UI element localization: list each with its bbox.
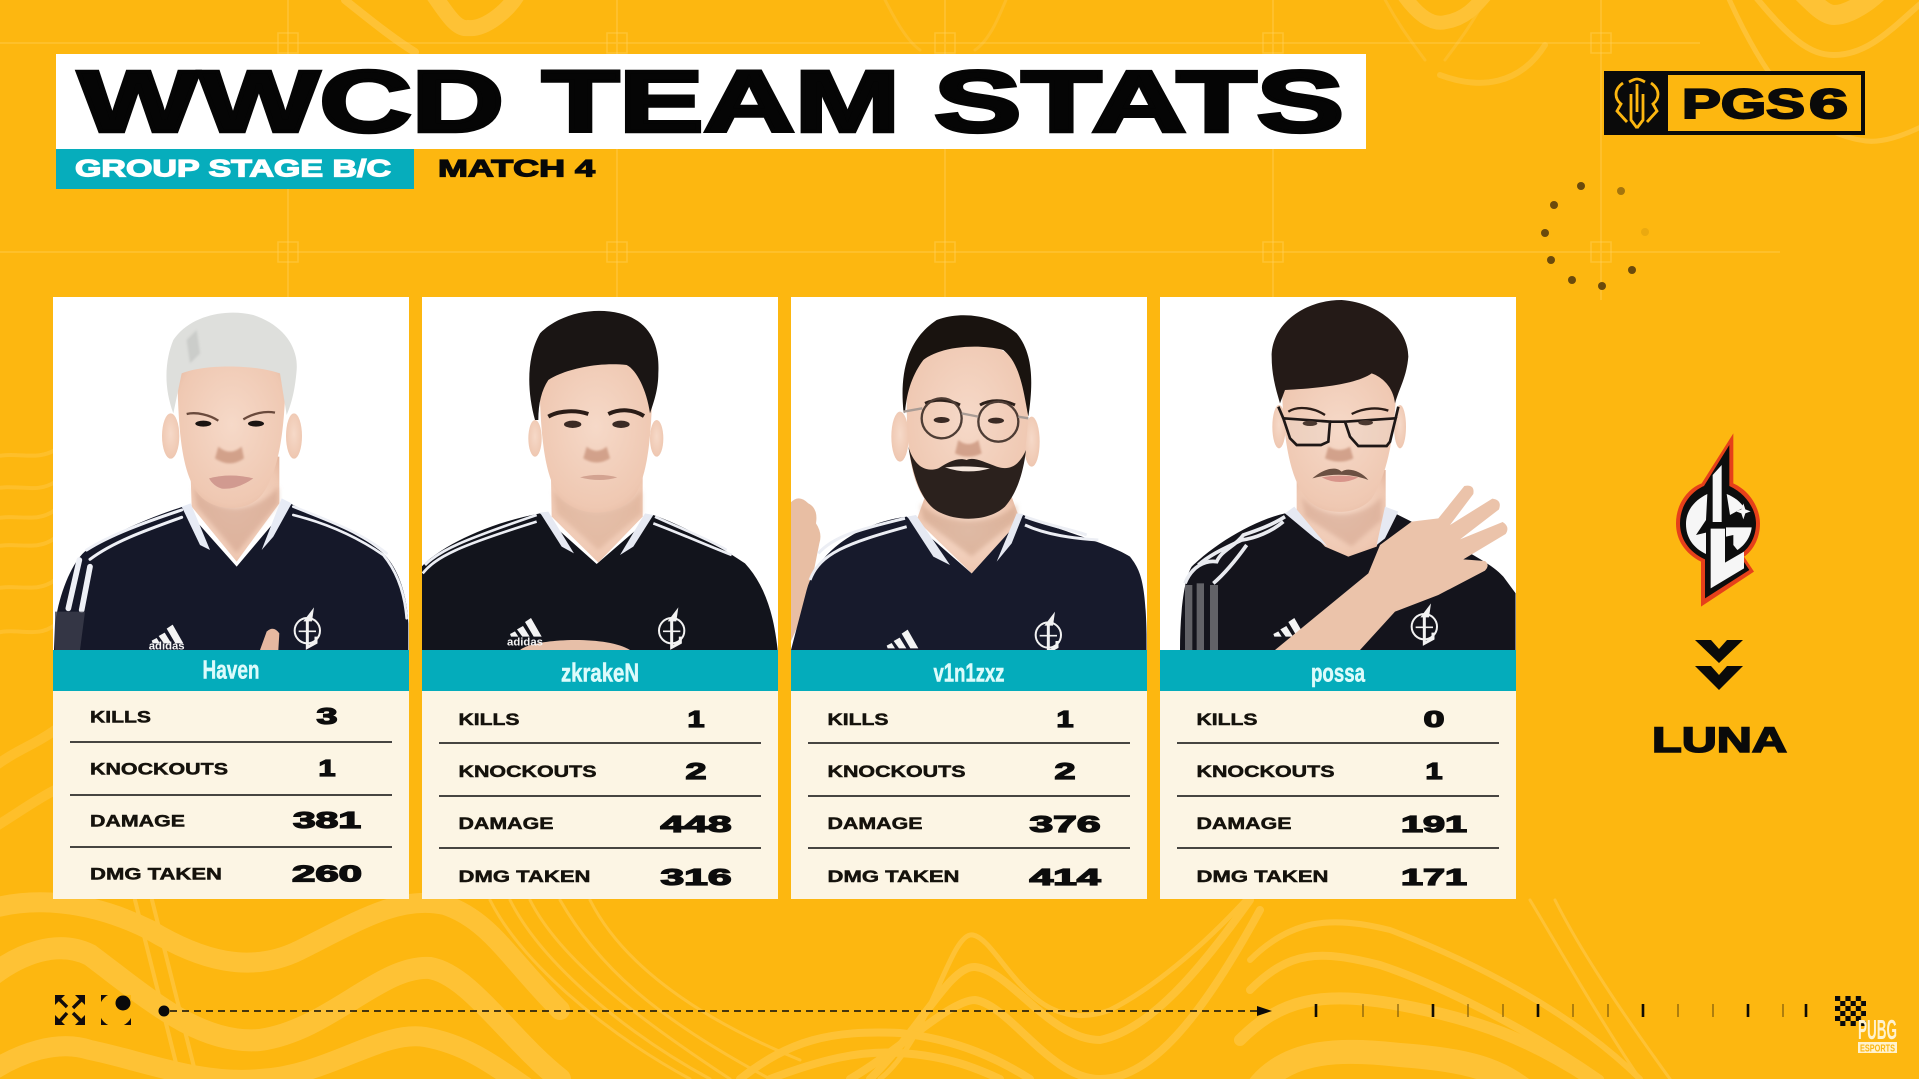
- portrait: Haven: adidas: [149, 640, 185, 652]
- stat rows: zkrakeN: 1: [688, 706, 705, 732]
- progress arrow: [158, 1006, 1272, 1016]
- stat rows: v1n1zxz: 376: [1030, 811, 1100, 837]
- stat rows: zkrakeN: 2: [686, 758, 706, 784]
- logo: PGS6: 6: [1809, 80, 1848, 127]
- stat rows: possa: 1: [1426, 758, 1443, 784]
- stat rows: v1n1zxz: KNOCKOUTS: [828, 763, 966, 781]
- icon: down chevrons: [1695, 640, 1743, 690]
- icon: expand arrows: [55, 995, 85, 1025]
- stat rows: v1n1zxz: KILLS: [828, 711, 888, 729]
- stat rows: zkrakeN: KNOCKOUTS: [458, 763, 596, 781]
- stat rows: Haven: [70, 703, 392, 886]
- title: [56, 54, 1366, 150]
- portrait: zkrakeN: [422, 311, 778, 650]
- stat rows: Haven: DAMAGE: [90, 812, 185, 830]
- stat rows: v1n1zxz: 1: [1056, 706, 1074, 732]
- panel: player card Haven: [53, 297, 409, 899]
- stat rows: v1n1zxz: 2: [1054, 758, 1076, 784]
- panel: player card zkrakeN: [422, 297, 778, 899]
- subtitle: group stage tag: GROUP STAGE B/C: [75, 156, 391, 182]
- team name: LUNA: [1652, 721, 1787, 760]
- stat rows: possa: KILLS: [1196, 711, 1258, 729]
- portrait: possa: [1180, 300, 1516, 650]
- stat rows: possa: KNOCKOUTS: [1196, 763, 1334, 781]
- logo: PGS6: [1604, 71, 1865, 135]
- title: TEAM: [542, 54, 900, 150]
- stat rows: Haven: 1: [318, 755, 336, 781]
- logo: PUBG esports: ESPORTS: [1860, 1044, 1895, 1054]
- stat rows: Haven: 3: [316, 703, 338, 729]
- stat rows: Haven: 381: [293, 807, 361, 833]
- icon: team logo: [1676, 433, 1760, 607]
- name: Haven: Haven: [202, 654, 260, 684]
- loading dots: [1541, 182, 1649, 290]
- subtitle: group stage tag: [56, 149, 414, 189]
- stat rows: Haven: DMG TAKEN: [90, 866, 222, 884]
- stat rows: v1n1zxz: DAMAGE: [828, 815, 922, 833]
- stat rows: Haven: KILLS: [90, 708, 151, 726]
- stat rows: possa: DAMAGE: [1196, 815, 1292, 833]
- stat rows: Haven: 260: [292, 860, 362, 886]
- stat rows: possa: 0: [1424, 706, 1444, 732]
- portrait: v1n1zxz: [790, 315, 1147, 652]
- stat rows: Haven: KNOCKOUTS: [90, 760, 228, 778]
- subtitle: match number: MATCH 4: [438, 156, 596, 182]
- stat rows: zkrakeN: KILLS: [458, 711, 520, 729]
- stat rows: possa: [1177, 706, 1499, 890]
- timeline ticks: [1316, 1004, 1806, 1017]
- stat rows: v1n1zxz: 414: [1030, 864, 1101, 890]
- stat rows: v1n1zxz: DMG TAKEN: [828, 868, 960, 886]
- stat rows: possa: DMG TAKEN: [1196, 868, 1328, 886]
- logo: PGS6: PGS: [1682, 80, 1805, 127]
- stat rows: zkrakeN: [439, 706, 761, 890]
- icon: square with dot: [99, 993, 133, 1027]
- stat rows: zkrakeN: 448: [660, 811, 732, 837]
- stat rows: possa: 171: [1401, 864, 1467, 890]
- stat rows: zkrakeN: DMG TAKEN: [458, 868, 590, 886]
- logo: PUBG esports: [1858, 1014, 1897, 1054]
- stat rows: possa: 191: [1401, 811, 1467, 837]
- title: STATS: [934, 54, 1344, 150]
- stat rows: zkrakeN: 316: [660, 864, 732, 890]
- background: faint layout grid: [0, 0, 1780, 300]
- stat rows: v1n1zxz: [808, 706, 1130, 890]
- name: zkrakeN: zkrakeN: [561, 658, 639, 688]
- portrait: Haven: [54, 313, 408, 652]
- name: possa: possa: [1311, 658, 1365, 688]
- portrait: zkrakeN: adidas: [507, 636, 543, 648]
- stat rows: zkrakeN: DAMAGE: [458, 815, 554, 833]
- icon: checkered flag: [1835, 996, 1866, 1026]
- title: WWCD: [78, 54, 504, 150]
- panel: player card v1n1zxz: [790, 297, 1147, 899]
- name: v1n1zxz: v1n1zxz: [934, 658, 1004, 688]
- panel: player card possa: [1160, 297, 1516, 899]
